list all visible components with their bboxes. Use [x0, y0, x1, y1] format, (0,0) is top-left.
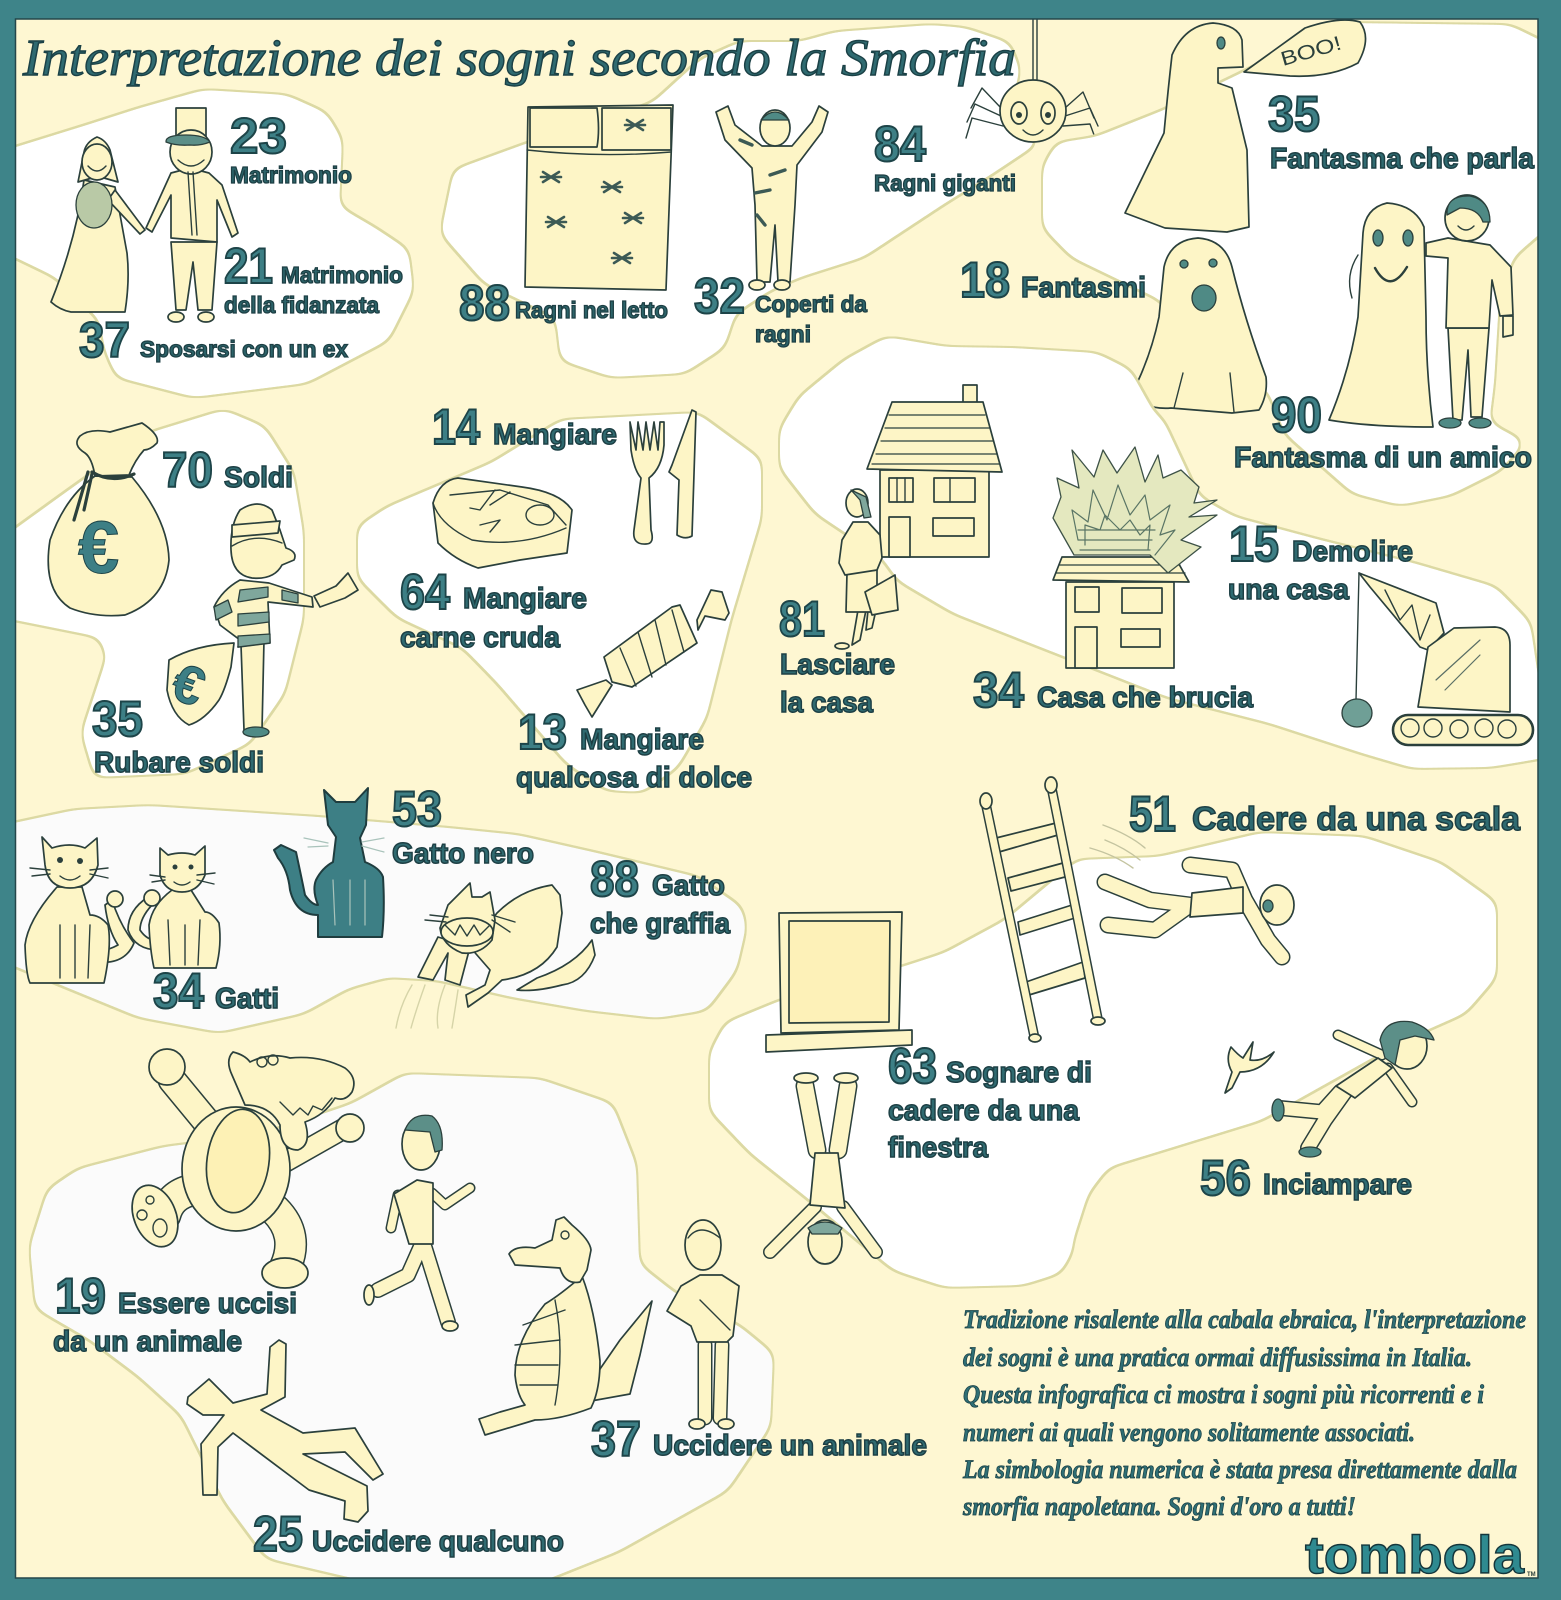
number and label 35 soldi: [92, 691, 264, 779]
blob: food background: [358, 413, 761, 792]
number and label 37 animale: [591, 1411, 927, 1467]
number and label 56: Inciampare: [1263, 1169, 1412, 1201]
number and label 63: [888, 1038, 1092, 1164]
number and label 13: 13: [518, 704, 567, 760]
icon: steak: [433, 478, 572, 568]
icon: hanging spider: [966, 19, 1098, 143]
number and label 70: [162, 442, 293, 498]
number and label 18: Fantasmi: [1021, 272, 1146, 304]
icon: talking ghost with speech bubble: [1125, 20, 1366, 232]
icon: ladder: [980, 777, 1145, 1042]
panel: spider dreams: [441, 19, 1098, 377]
number and label 70: Soldi: [224, 462, 293, 494]
number and label 84: [874, 116, 1016, 196]
title: Interpretazione dei sogni secondo la Smorfia: [22, 30, 1016, 87]
number and label 35 fantasma: [1268, 86, 1535, 175]
number and label 81: 81: [779, 591, 825, 647]
number and label 32: 32: [694, 268, 745, 324]
number and label 35 soldi: Rubare soldi: [94, 747, 264, 779]
number and label 81: Lasciare: [780, 649, 895, 681]
icon: talking ghost with speech bubble: BOO!: [1278, 33, 1344, 71]
number and label 70: 70: [162, 442, 213, 498]
panel: money dreams: [0, 410, 358, 779]
number and label 14: [432, 399, 617, 455]
number and label 63: 63: [888, 1038, 937, 1094]
number and label 21: della fidanzata: [224, 292, 379, 318]
number and label 18: 18: [960, 252, 1010, 308]
number and label 23: [230, 108, 352, 188]
number and label 37 animale: 37: [591, 1411, 641, 1467]
number and label 13: Mangiare: [580, 724, 704, 756]
panel: cat dreams: [0, 781, 746, 1032]
number and label 51: [1129, 786, 1521, 842]
number and label 53: [392, 781, 534, 870]
icon: thief with sack and torch: [164, 504, 358, 737]
icon: money bag: [48, 423, 169, 616]
number and label 32: [694, 268, 867, 347]
number and label 90: [1234, 387, 1532, 474]
icon: bed with spiders: [525, 105, 673, 290]
number and label 51: 51: [1129, 786, 1176, 842]
icon: scratching cat: [396, 883, 595, 1028]
number and label 37: Sposarsi con un ex: [140, 336, 348, 362]
intro paragraph: [962, 1305, 1526, 1521]
icon: burning house: [1053, 447, 1217, 668]
icon: man falling head first: [770, 1073, 876, 1264]
number and label 90: 90: [1271, 387, 1322, 443]
number and label 51: Cadere da una scala: [1192, 800, 1521, 837]
intro paragraph: La simbologia numerica è stata presa direttamente dalla: [962, 1455, 1517, 1484]
number and label 34 gatti: [153, 963, 279, 1019]
icon: banana peel: [1225, 1042, 1274, 1093]
number and label 15: 15: [1229, 516, 1279, 572]
icon: woman leaving with suitcase: [835, 489, 898, 649]
panel: killing dreams: [30, 1049, 927, 1585]
number and label 88 gatto: [590, 851, 731, 940]
blob: houses background: [780, 337, 1550, 768]
icon: groom: [146, 108, 238, 322]
number and label 88 gatto: che graffia: [590, 908, 731, 940]
number and label 13: [516, 704, 752, 794]
number and label 88: 88: [459, 275, 510, 331]
blob: killing background: [30, 1074, 773, 1585]
number and label 37: 37: [79, 312, 130, 368]
number and label 14: 14: [432, 399, 480, 455]
number and label 56: 56: [1200, 1150, 1251, 1206]
panel: house dreams: [779, 337, 1550, 768]
icon: friend beside ghost: [1426, 195, 1513, 428]
number and label 21: [224, 238, 403, 318]
number and label 19: 19: [55, 1268, 106, 1324]
number and label 37 animale: Uccidere un animale: [653, 1430, 927, 1462]
number and label 88: [459, 275, 668, 331]
number and label 19: da un animale: [53, 1326, 242, 1358]
icon: two cats: [25, 837, 220, 983]
icon: thief with sack and torch: €: [164, 652, 213, 718]
number and label 88 gatto: 88: [590, 851, 639, 907]
intro paragraph: smorfia napoletana. Sogni d'oro a tutti!: [962, 1492, 1356, 1521]
number and label 64: Mangiare: [463, 583, 587, 615]
logo: tombola: tombola: [1305, 1526, 1525, 1585]
number and label 18: [960, 252, 1146, 308]
number and label 64: 64: [400, 564, 450, 620]
number and label 25: Uccidere qualcuno: [312, 1526, 564, 1558]
icon: running man: [364, 1115, 470, 1331]
intro paragraph: numeri ai quali vengono solitamente associati.: [963, 1418, 1415, 1447]
panel: falling dreams: [710, 777, 1521, 1287]
number and label 15: [1228, 516, 1413, 606]
icon: fork and knife: [630, 410, 696, 544]
number and label 35 soldi: 35: [92, 691, 143, 747]
panel: wedding dreams: [0, 90, 413, 397]
icon: crane with wrecking ball: [1342, 573, 1533, 745]
icon: bear attacking: [124, 1049, 364, 1288]
icon: friendly ghost: [1329, 203, 1433, 427]
number and label 15: una casa: [1228, 574, 1350, 606]
number and label 25: [253, 1506, 564, 1562]
number and label 81: la casa: [780, 687, 874, 719]
icon: man falling from ladder: [1105, 865, 1294, 957]
number and label 21: Matrimonio: [281, 262, 403, 288]
number and label 34 gatti: 34: [153, 963, 204, 1019]
number and label 35 fantasma: Fantasma che parla: [1270, 143, 1535, 175]
number and label 37: [79, 312, 348, 368]
number and label 84: Ragni giganti: [874, 170, 1016, 196]
blob: ghosts background: [1043, 23, 1550, 505]
number and label 63: finestra: [888, 1132, 989, 1164]
number and label 53: 53: [392, 781, 442, 837]
blob: cats background: [0, 806, 746, 1032]
number and label 23: 23: [230, 108, 287, 164]
logo: tombola: TM: [1527, 1572, 1536, 1578]
icon: money bag: €: [78, 506, 119, 589]
number and label 34 gatti: Gatti: [215, 983, 279, 1015]
number and label 19: Essere uccisi: [118, 1288, 297, 1320]
intro paragraph: Tradizione risalente alla cabala ebraica, l'interpretazione: [963, 1305, 1526, 1334]
panel: food dreams: [358, 399, 761, 794]
number and label 64: carne cruda: [400, 622, 561, 654]
icon: window with sill: [766, 912, 912, 1052]
number and label 90: Fantasma di un amico: [1234, 442, 1532, 474]
number and label 25: 25: [253, 1506, 303, 1562]
number and label 63: Sognare di: [946, 1057, 1092, 1089]
icon: ghost with open mouth: [1130, 238, 1266, 413]
icon: man covered in spiders: [716, 106, 828, 290]
number and label 34 casa: 34: [973, 662, 1024, 718]
number and label 32: ragni: [755, 321, 811, 347]
icon: man tripping: [1272, 1021, 1434, 1157]
blob: wedding background: [0, 90, 413, 397]
number and label 53: Gatto nero: [392, 838, 534, 870]
number and label 34 casa: [973, 662, 1254, 718]
icon: house: [867, 385, 1002, 557]
icon: body outline: [187, 1340, 383, 1522]
number and label 88 gatto: Gatto: [652, 870, 725, 902]
number and label 84: 84: [874, 116, 926, 172]
blob: money background: [0, 410, 303, 777]
blob: spiders background: [441, 25, 1038, 377]
icon: standing man: [667, 1220, 739, 1429]
number and label 81: [779, 591, 895, 719]
number and label 23: Matrimonio: [230, 162, 352, 188]
icon: crocodile: [479, 1217, 652, 1435]
number and label 21: 21: [224, 238, 273, 294]
number and label 64: [400, 564, 587, 654]
number and label 56: [1200, 1150, 1412, 1206]
number and label 15: Demolire: [1292, 536, 1413, 568]
intro paragraph: Questa infografica ci mostra i sogni più ricorrenti e i: [963, 1380, 1485, 1409]
icon: wrapped candy: [577, 590, 729, 717]
number and label 34 casa: Casa che brucia: [1037, 682, 1254, 714]
number and label 35 fantasma: 35: [1268, 86, 1320, 142]
number and label 32: Coperti da: [755, 291, 867, 317]
blob: falling background: [710, 833, 1496, 1287]
icon: bride: [51, 137, 145, 312]
intro paragraph: dei sogni è una pratica ormai diffusissima in Italia.: [963, 1343, 1472, 1372]
number and label 63: cadere da una: [888, 1095, 1080, 1127]
number and label 13: qualcosa di dolce: [516, 762, 752, 794]
number and label 88: Ragni nel letto: [515, 297, 668, 323]
number and label 19: [53, 1268, 297, 1358]
number and label 14: Mangiare: [493, 419, 617, 451]
icon: black cat: [274, 788, 384, 937]
panel: ghost dreams: [960, 20, 1550, 505]
